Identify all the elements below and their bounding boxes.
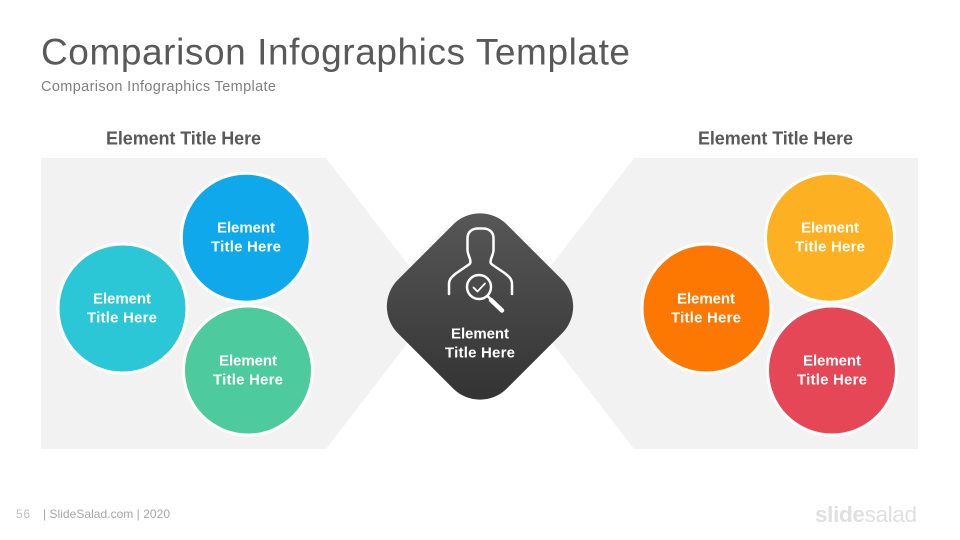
- subtitle: Comparison Infographics Template: [41, 79, 276, 95]
- circle: red: Element: [803, 352, 861, 370]
- circle: yellow: Element: [801, 220, 859, 236]
- right panel heading: Element Title Here: [698, 128, 853, 148]
- logo: slidesalad: [815, 502, 917, 527]
- icon: person with magnifying glass: [449, 228, 512, 310]
- center label: [445, 326, 515, 362]
- center label: Element: [451, 326, 509, 342]
- center label: Title Here: [445, 344, 515, 362]
- circle: blue: [181, 173, 310, 302]
- right panel background: [522, 158, 918, 449]
- circle: red: [768, 306, 896, 435]
- circle: green: Title Here: [213, 372, 283, 388]
- circle: orange: [642, 244, 771, 373]
- diamond background: [371, 198, 589, 415]
- circle: red: Title Here: [797, 372, 867, 388]
- circle: yellow: [766, 173, 894, 302]
- circle: orange: Title Here: [671, 310, 741, 326]
- circle: green: [184, 306, 312, 435]
- circle: teal: Title Here: [87, 310, 157, 326]
- panel: right comparison: [522, 128, 918, 449]
- center diamond: [371, 198, 589, 415]
- title: Comparison Infographics Template: [41, 32, 630, 72]
- circle: teal: [58, 244, 187, 373]
- circle: orange: Element: [677, 290, 735, 308]
- page number: 56: [16, 507, 30, 521]
- panel: left comparison: [41, 128, 438, 449]
- left panel background: [41, 158, 438, 449]
- circle: teal: Element: [93, 290, 151, 308]
- circle: blue: Title Here: [211, 238, 281, 256]
- left panel heading: Element Title Here: [106, 128, 261, 148]
- footer text: | SlideSalad.com | 2020: [43, 507, 170, 521]
- circle: yellow: Title Here: [795, 238, 865, 256]
- circle: blue: Element: [217, 220, 275, 236]
- circle: green: Element: [219, 352, 277, 370]
